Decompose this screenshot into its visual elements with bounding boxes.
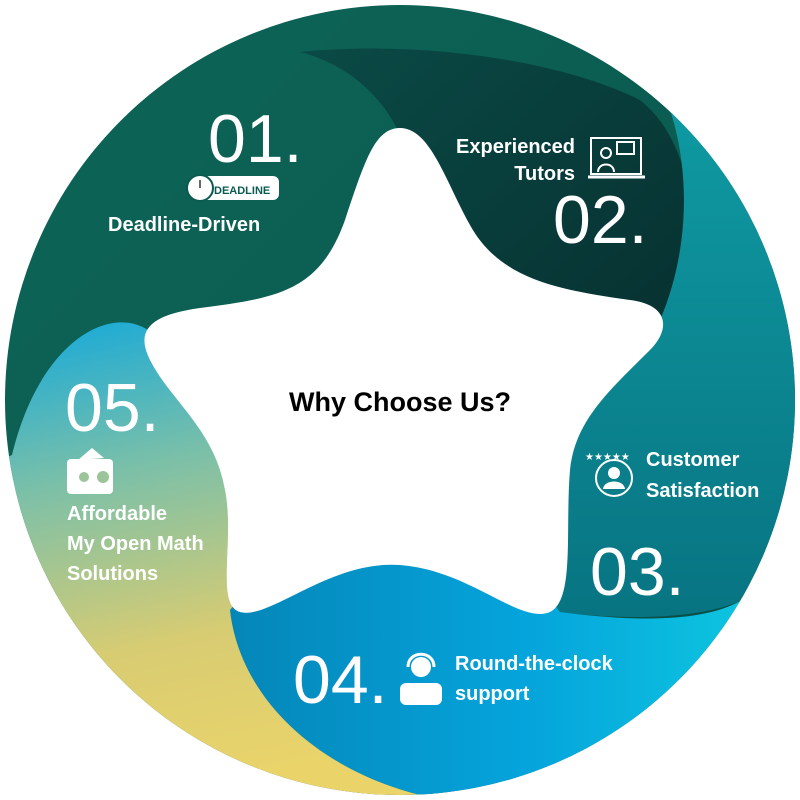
panel: 05 affordable [0,322,430,800]
block 02: Tutors [514,163,575,185]
block 03 [585,449,759,610]
block 03: 03. [590,534,685,610]
block 04 [293,642,614,718]
block 04: support [455,683,530,705]
icon: headset person [400,654,442,705]
panel: 03 customer satisfaction [556,112,795,617]
block 05 [65,370,204,585]
block 05: Solutions [67,563,158,585]
icon: satisfaction: ★★★★★ [585,452,630,463]
block 04: Round-the-clock [455,653,614,675]
icon: deadline [187,175,279,201]
icon: wallet [67,448,113,494]
block 02 [456,136,648,258]
title: Why Choose Us? [289,387,511,417]
icon: satisfaction [585,452,632,496]
block 04: 04. [293,642,388,718]
block 02: Experienced [456,136,575,158]
block 02: 02. [553,182,648,258]
block 03: Customer [646,449,740,471]
block 01 [108,101,303,236]
block 05: Affordable [67,503,167,525]
icon: deadline: DEADLINE [214,185,270,197]
block 01: Deadline-Driven [108,214,260,236]
star center [144,128,663,614]
block 03: Satisfaction [646,480,759,502]
icon: tutor screen [588,138,645,177]
block 05: 05. [65,370,160,446]
block 05: My Open Math [67,533,204,555]
block 01: 01. [208,101,303,177]
panel: 02 experienced tutors [300,48,684,316]
panel: 04 support [230,564,740,794]
